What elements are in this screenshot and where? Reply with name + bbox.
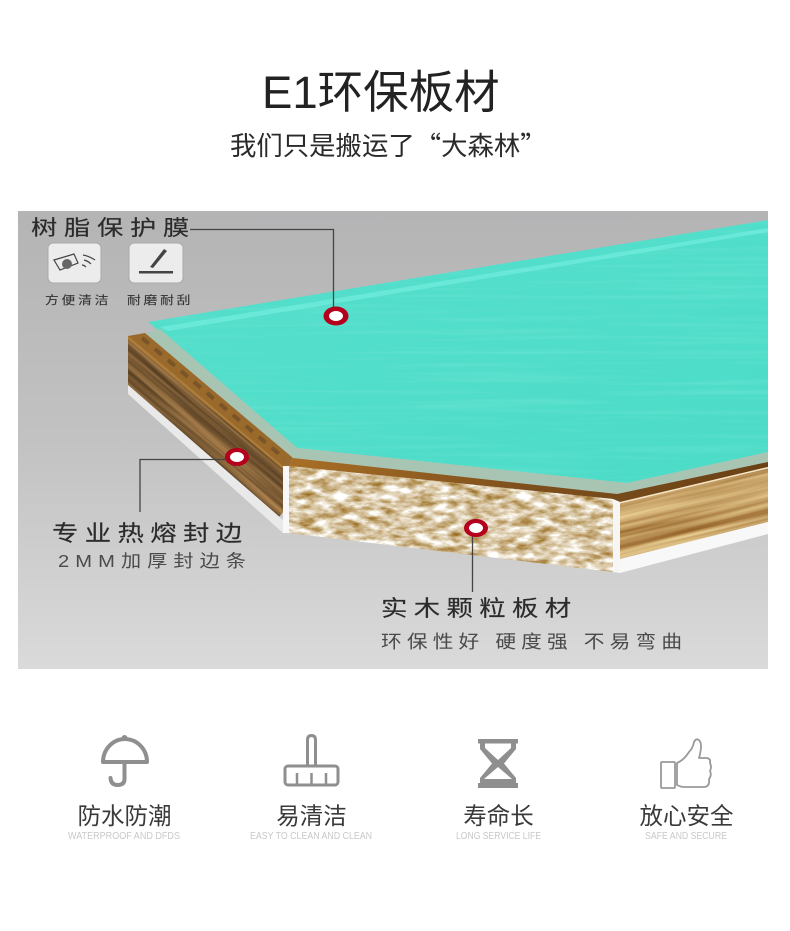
label: 2mm thick edge strip: 2MM加厚封边条: [58, 551, 252, 571]
board: right white strip: [620, 522, 768, 573]
label: resin protective film: 树脂保护膜: [31, 216, 196, 240]
icon: easy clean: [48, 243, 101, 283]
label: hot-melt edge banding: 专业热熔封边: [52, 522, 248, 546]
feature: long service life: [456, 739, 541, 842]
label: scratch resistant: 耐磨耐刮: [127, 294, 193, 307]
board: right white corner strip: [613, 499, 620, 573]
label: resin protective film: [31, 216, 334, 309]
feature title: 易清洁: [276, 803, 347, 829]
feature title: 放心安全: [640, 803, 734, 829]
board: resin film top surface: [140, 215, 780, 490]
feature title: 寿命长: [463, 803, 534, 829]
icon: hourglass: [478, 739, 518, 788]
leader line: resin film: [190, 230, 334, 309]
label: solid wood particle board: 实木颗粒板材: [381, 597, 577, 621]
board: left white strip: [128, 385, 283, 533]
feature: waterproof: [68, 737, 180, 842]
label: easy clean: 方便清洁: [45, 293, 111, 307]
title: E1环保板材: [262, 67, 500, 118]
panel background: [18, 211, 768, 669]
marker: particle core: [464, 519, 488, 537]
board: top bevel of edge banding: [128, 333, 768, 502]
feature subtitle: EASY TO CLEAN AND CLEAN: [250, 831, 372, 842]
subtitle: 我们只是搬运了“大森林”: [230, 124, 547, 163]
feature: easy to clean: [250, 736, 372, 842]
leader line: edge banding: [140, 460, 226, 512]
panel: board cross-section: [15, 211, 790, 669]
feature title: 防水防潮: [78, 803, 172, 829]
board: particle board core: [289, 466, 613, 572]
board: corner white strip: [283, 466, 289, 533]
icon: scratch resistant: [129, 243, 183, 283]
icon: thumbs up: [661, 739, 711, 788]
icon: broom: [285, 736, 338, 785]
feature subtitle: WATERPROOF AND DFDS: [68, 831, 180, 842]
board: left wood edge banding: [128, 336, 283, 517]
feature subtitle: LONG SERVICE LIFE: [456, 831, 541, 842]
leader line: particle core: [472, 535, 474, 592]
marker: edge banding: [225, 448, 249, 466]
label: particle board benefits: 环保性好 硬度强 不易弯曲: [381, 632, 687, 653]
board: right light wood edge banding: [620, 467, 768, 559]
icon: umbrella: [103, 737, 147, 785]
feature: safe and secure: [640, 739, 734, 842]
feature subtitle: SAFE AND SECURE: [645, 831, 727, 842]
board: translucent film edge: [145, 329, 768, 494]
marker: resin film: [324, 306, 348, 326]
